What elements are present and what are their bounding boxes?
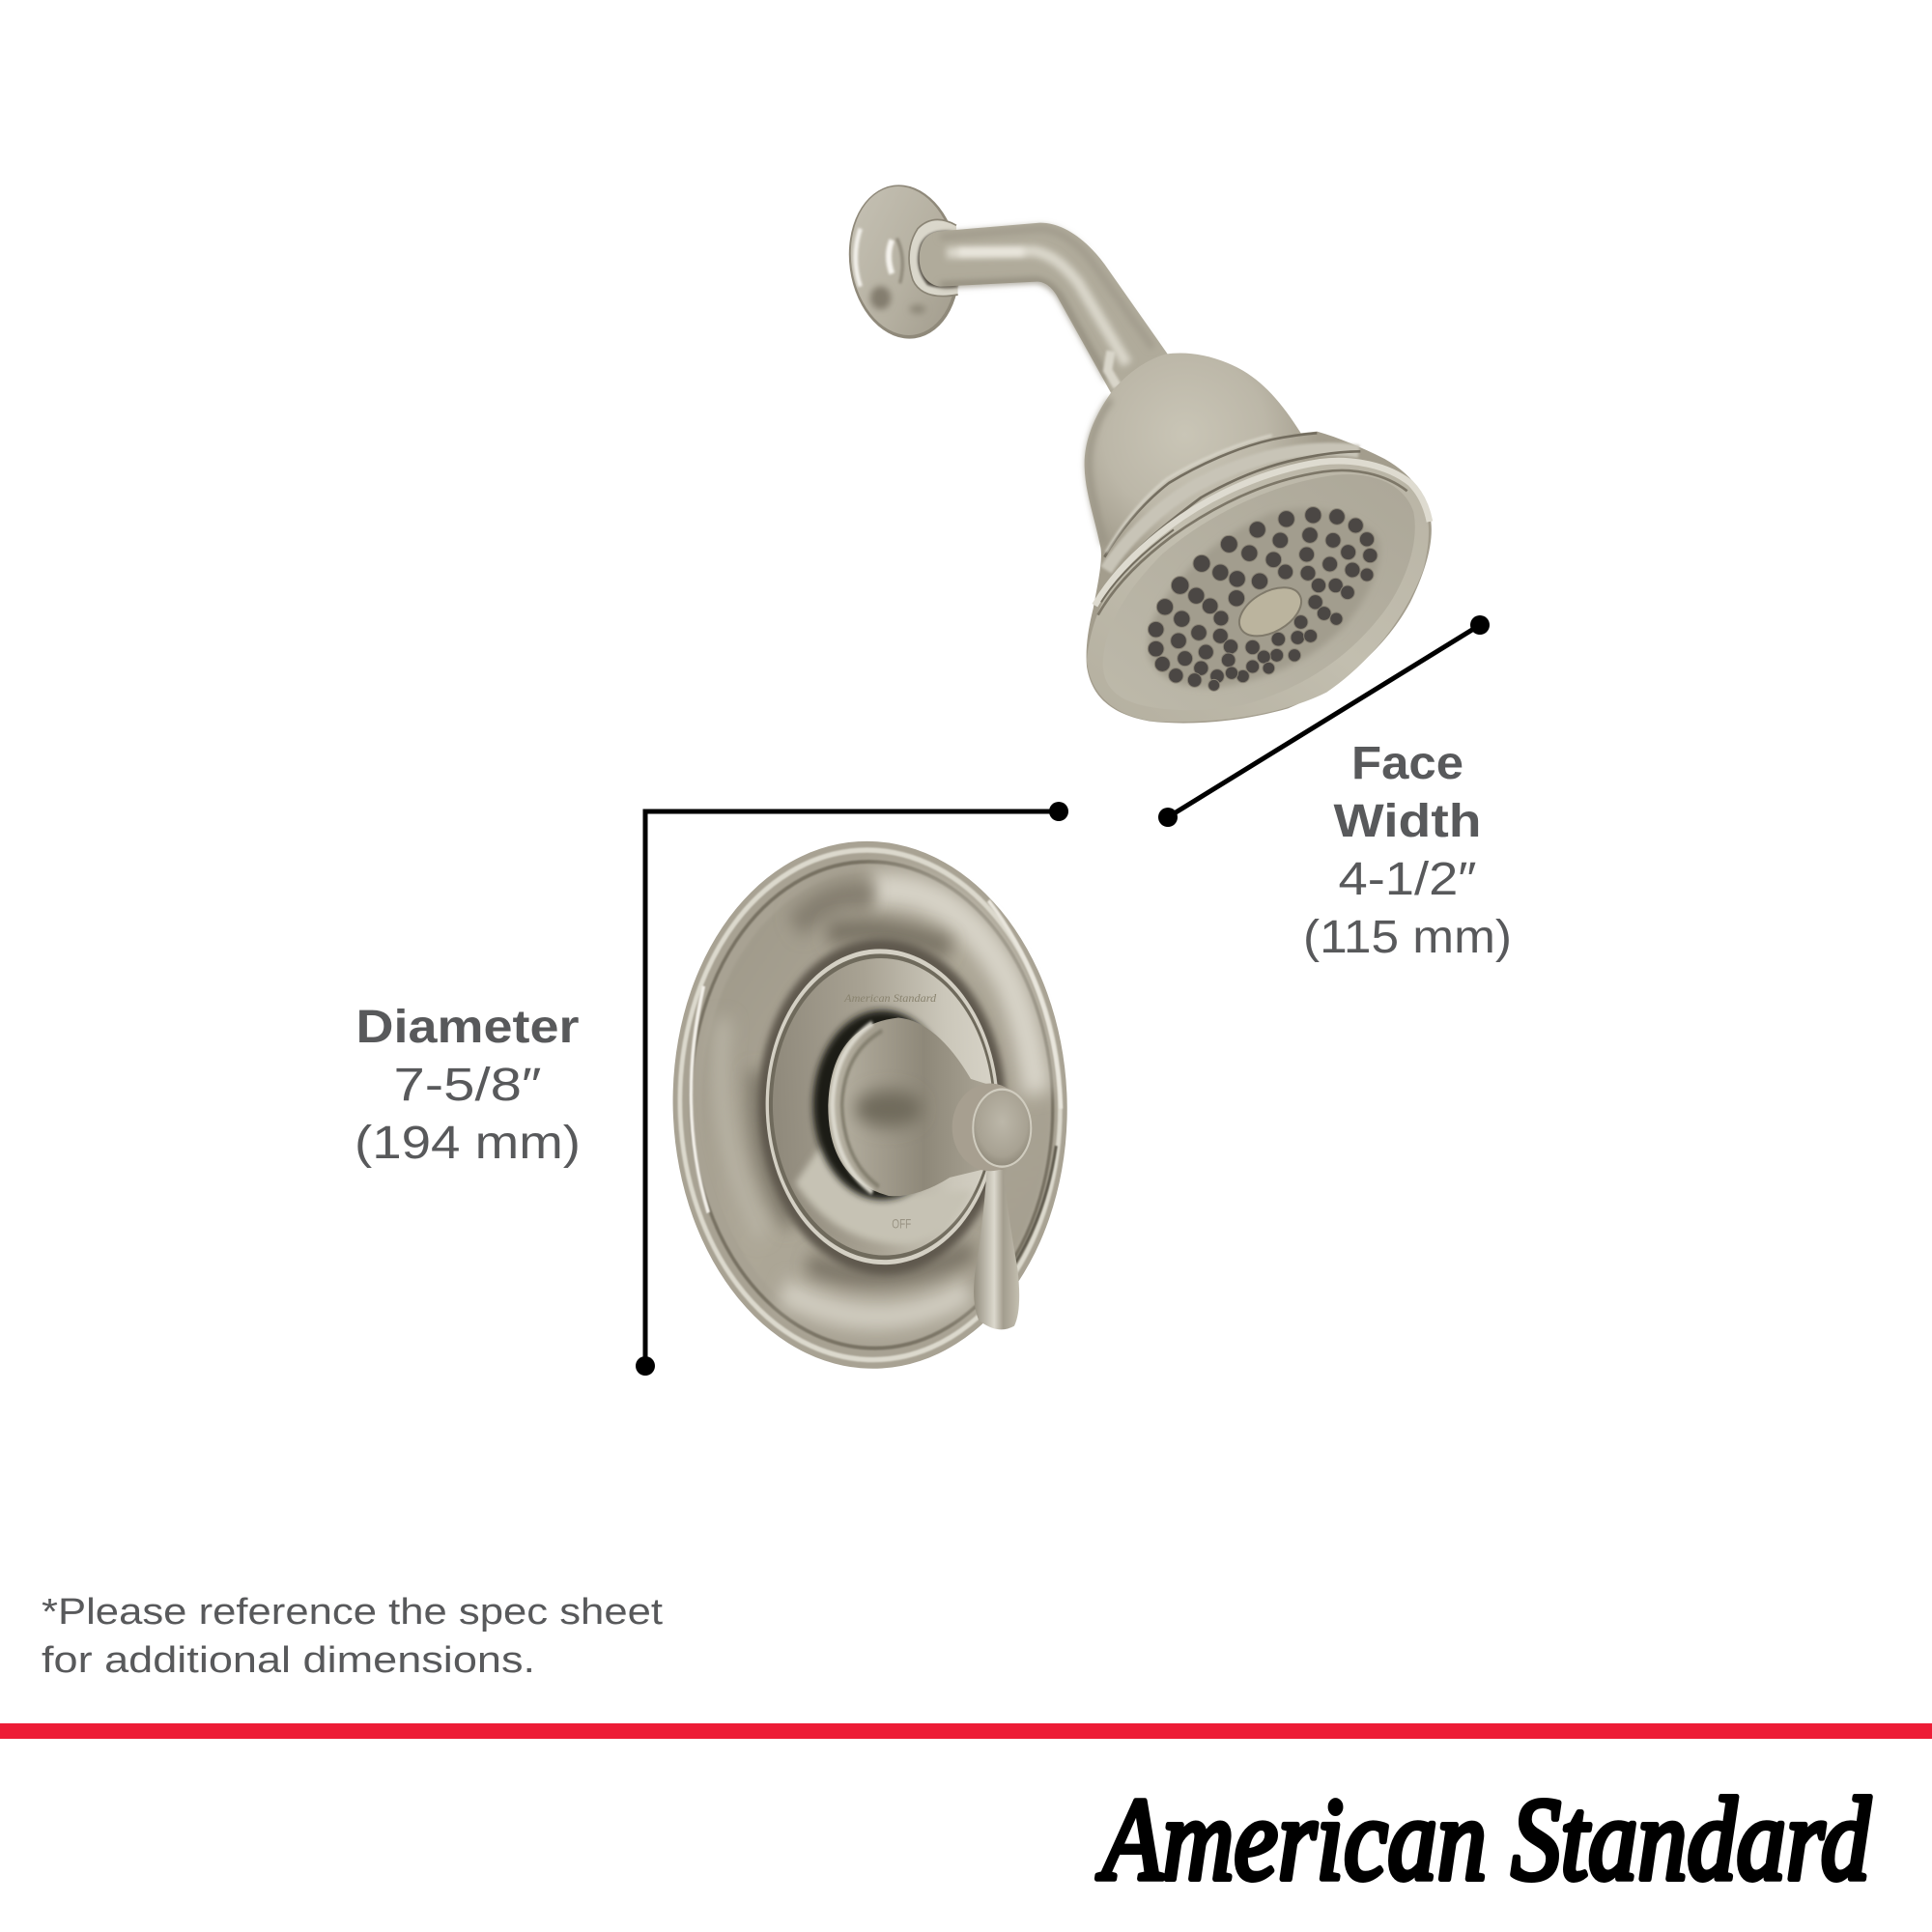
wall flange xyxy=(839,178,969,346)
diameter label: (194 mm) xyxy=(355,1118,581,1169)
footnote: for additional dimensions. xyxy=(42,1640,535,1681)
diameter label: 7-5/8″ xyxy=(394,1060,541,1111)
perforated area xyxy=(1148,508,1380,688)
diameter label xyxy=(355,1002,581,1169)
escutcheon plate xyxy=(662,830,1079,1380)
bell body silhouette xyxy=(1085,353,1432,724)
arm pipe xyxy=(920,223,1169,393)
face width label: (115 mm) xyxy=(1303,912,1512,963)
face width label xyxy=(1303,738,1512,963)
footnote xyxy=(42,1592,664,1681)
rim highlight rings xyxy=(1094,461,1430,615)
valve trim product photo xyxy=(662,830,1079,1380)
lever knob xyxy=(952,1084,1031,1171)
flange collar xyxy=(909,219,958,297)
lever handle xyxy=(974,1168,1019,1329)
engraved off mark: OFF xyxy=(892,1216,911,1232)
face width label: 4-1/2″ xyxy=(1339,854,1476,905)
shower head xyxy=(1085,353,1432,724)
shower arm and wall flange xyxy=(839,178,1169,393)
face recess xyxy=(1103,474,1415,710)
footnote: *Please reference the spec sheet xyxy=(42,1592,664,1633)
face rim xyxy=(1087,462,1429,722)
collar bands xyxy=(1104,433,1360,578)
inner dial plate xyxy=(751,931,1013,1282)
handle hub xyxy=(813,1010,988,1200)
spray nozzles xyxy=(1148,507,1378,691)
face width label: Width xyxy=(1333,796,1482,847)
face width dimension line xyxy=(1158,615,1490,827)
engraved brand on dial: American Standard xyxy=(843,992,937,1005)
diameter dimension bracket xyxy=(636,802,1068,1376)
bell edge shading xyxy=(1089,399,1111,544)
face width label: Face xyxy=(1351,738,1463,789)
diameter label: Diameter xyxy=(355,1002,580,1053)
center plate xyxy=(1231,578,1310,646)
red divider bar xyxy=(0,1723,1932,1739)
